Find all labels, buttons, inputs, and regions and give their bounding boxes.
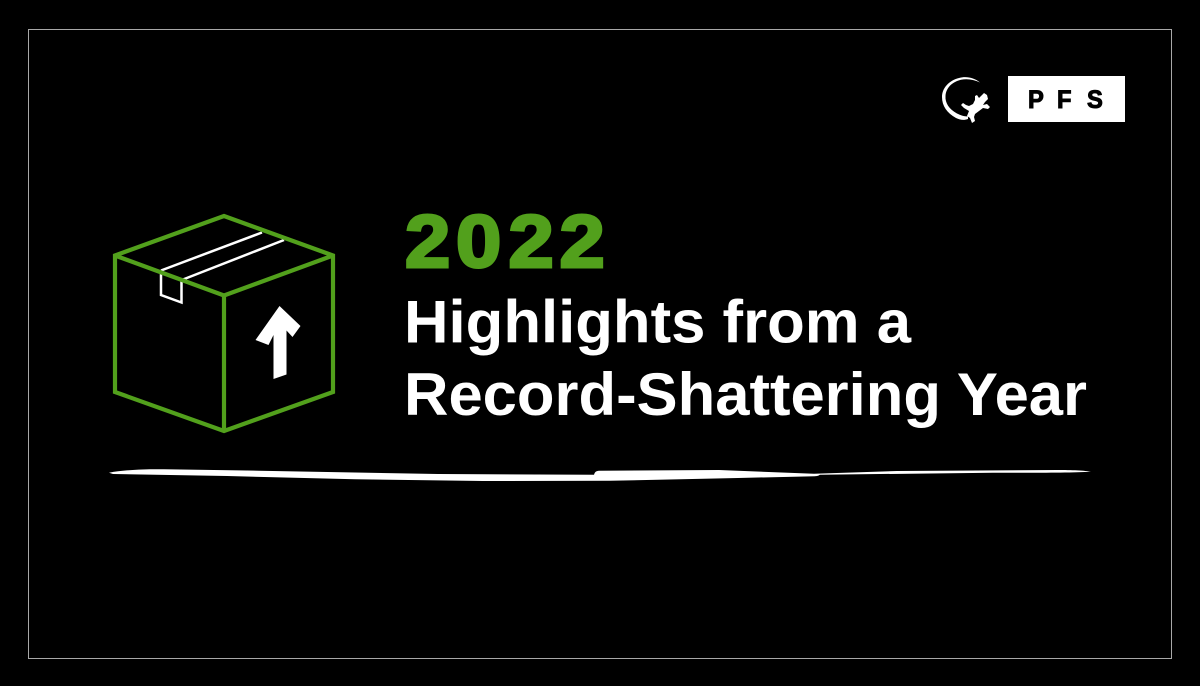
icon: gecko logo (942, 77, 990, 123)
logo: PFS badge: P (1028, 86, 1044, 114)
brush-stroke underline (109, 469, 1091, 481)
logo: PFS badge: S (1087, 86, 1103, 114)
logo: PFS badge: F (1057, 86, 1072, 114)
box tape and flap (161, 232, 284, 302)
title: year: 2 (508, 201, 554, 283)
title: year: 2 (405, 201, 450, 283)
title: year: 0 (456, 201, 501, 283)
title: line one: Highlights from a (404, 288, 912, 356)
logo: PFS badge (1008, 76, 1125, 122)
icon: package box with up arrow (115, 216, 333, 431)
box outline (115, 216, 333, 431)
up arrow (256, 306, 300, 379)
title: year (405, 201, 605, 283)
title: year: 2 (560, 201, 605, 283)
title: line two: Record-Shattering Year (404, 361, 1087, 428)
